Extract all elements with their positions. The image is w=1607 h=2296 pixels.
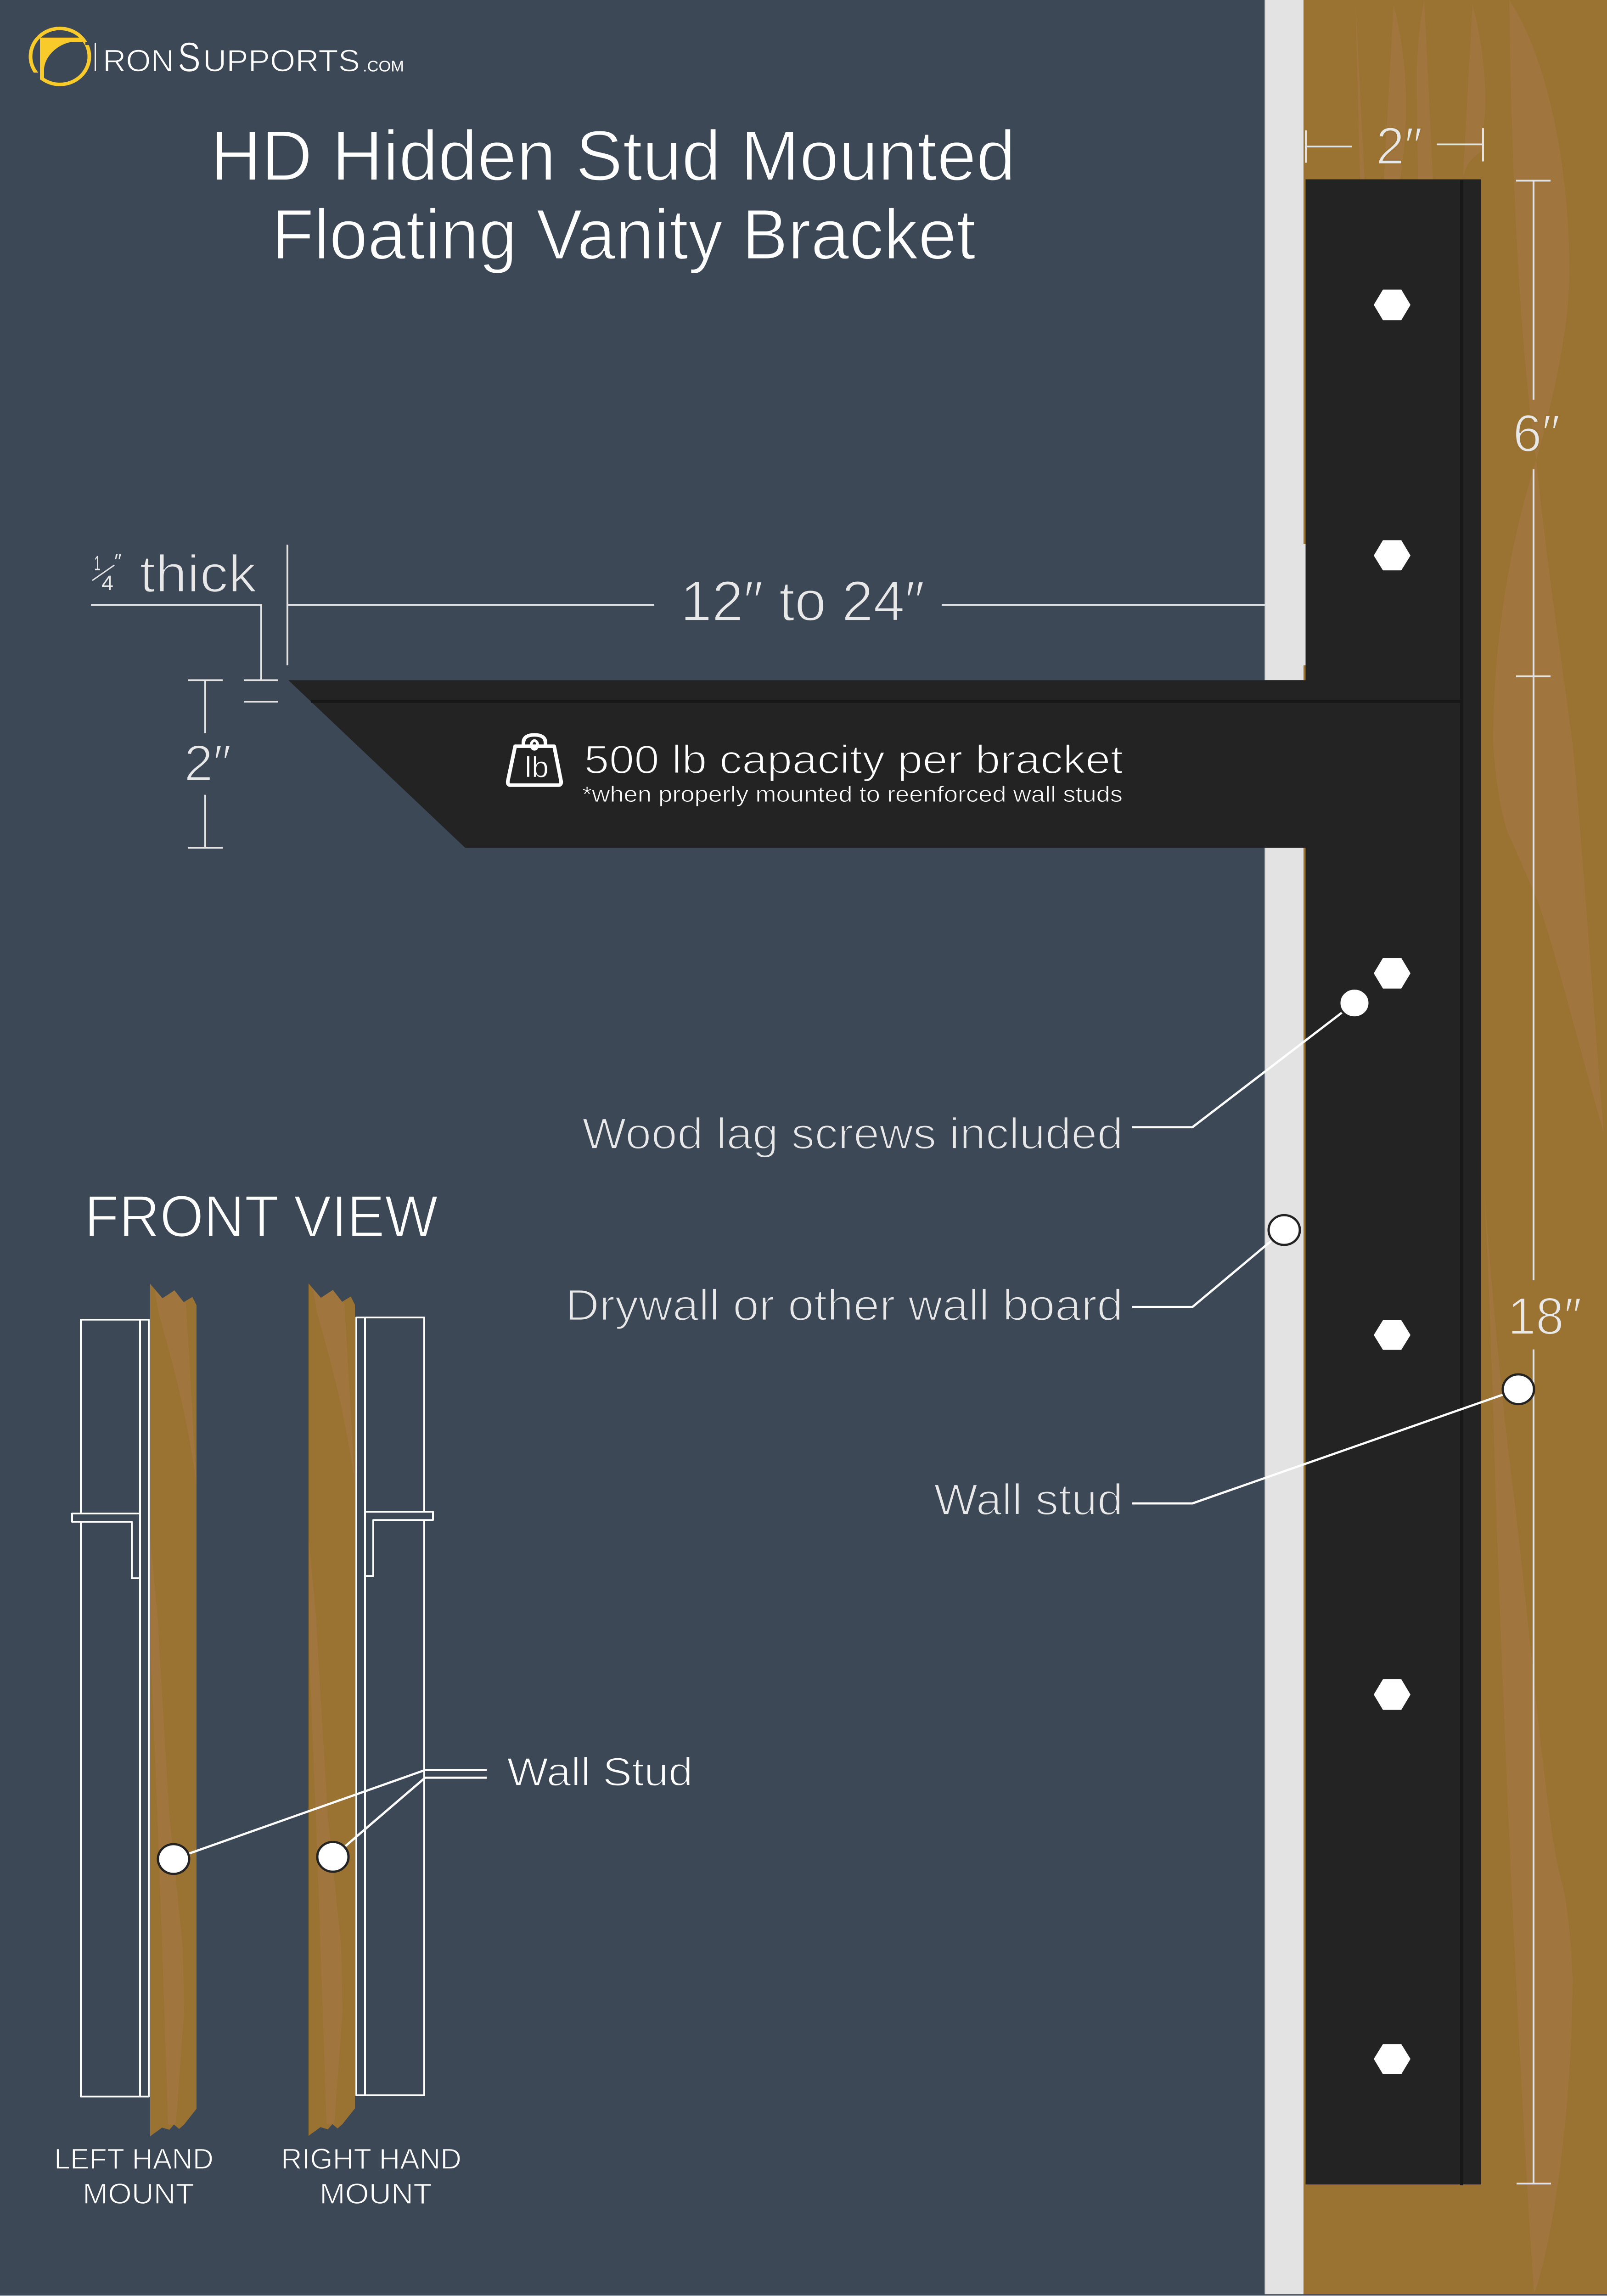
label: right hand mount — [281, 2143, 461, 2210]
callout: wall stud — [934, 1374, 1534, 1524]
icon: logo mark — [30, 28, 94, 84]
label: right hand mount: RIGHT HAND — [281, 2143, 461, 2175]
bracket — [288, 180, 1481, 2185]
right hand stud — [309, 1283, 355, 2136]
title — [210, 116, 1016, 274]
heading: front view: FRONT VIEW — [84, 1183, 438, 1249]
left hand bracket outline — [72, 1320, 149, 2097]
dimension: quarter inch thick: 1 — [94, 551, 101, 575]
capacity callout — [508, 735, 1123, 807]
dimension: 6 inch — [1513, 180, 1560, 676]
drywall — [1264, 0, 1306, 2294]
icon: weight — [508, 735, 561, 785]
callout: front view wall stud — [158, 1750, 693, 1874]
dimension: bracket depth 2 inch: 2″ — [1376, 117, 1422, 175]
dimension: 18 inch — [1508, 676, 1582, 2183]
callout: drywall: Drywall or other wall board — [565, 1281, 1123, 1329]
right hand bracket outline — [356, 1317, 433, 2095]
dimension: quarter inch thick: ″ — [114, 549, 122, 573]
dimension: 18 inch: 18″ — [1508, 1287, 1582, 1345]
dimension: arm length 12 to 24 inch — [287, 545, 1265, 665]
diagram: left hand mount — [54, 1284, 214, 2210]
logo wordmark — [93, 34, 404, 80]
logo wordmark: UPPORTS — [203, 43, 360, 78]
dimension: quarter inch thick: thick — [140, 544, 257, 603]
capacity text: 500 lb capacity per bracket — [584, 737, 1123, 782]
callout: wood lag screws — [582, 989, 1370, 1158]
logo wordmark: RON — [103, 43, 174, 78]
logo — [30, 28, 404, 84]
logo wordmark: .COM — [363, 58, 404, 75]
label: left hand mount: LEFT HAND — [54, 2143, 214, 2175]
dimension: arm length 12 to 24 inch: 12″ to 24″ — [680, 569, 925, 633]
label: left hand mount: MOUNT — [83, 2178, 194, 2210]
dimension: 6 inch: 6″ — [1513, 404, 1560, 462]
callout: wood lag screws: Wood lag screws included — [582, 1109, 1123, 1158]
dimension: quarter inch thick — [91, 544, 278, 702]
dimension: arm height 2 inch: 2″ — [184, 735, 231, 792]
capacity footnote: *when properly mounted to reenforced wall studs — [582, 782, 1123, 807]
icon: hex bolts — [1374, 290, 1410, 2074]
diagram: right hand mount — [281, 1283, 461, 2210]
dimension: arm height 2 inch — [184, 680, 231, 848]
label: right hand mount: MOUNT — [320, 2178, 432, 2210]
title: HD Hidden Stud Mounted — [210, 116, 1016, 196]
left hand stud — [150, 1284, 197, 2136]
wall stud with wood grain — [1304, 0, 1607, 2294]
bottom edge line — [0, 2295, 1607, 2296]
label: left hand mount — [54, 2143, 214, 2210]
title: Floating Vanity Bracket — [272, 194, 976, 274]
logo wordmark: S — [178, 34, 201, 80]
callout: drywall — [565, 1215, 1300, 1329]
logo wordmark: I — [93, 34, 97, 80]
callout: wall stud: Wall stud — [934, 1475, 1123, 1524]
callout: front view wall stud: Wall Stud — [507, 1750, 693, 1795]
dimension: bracket depth 2 inch — [1306, 117, 1483, 175]
dimension: quarter inch thick: 4 — [101, 571, 113, 595]
icon: weight: lb — [525, 751, 549, 783]
